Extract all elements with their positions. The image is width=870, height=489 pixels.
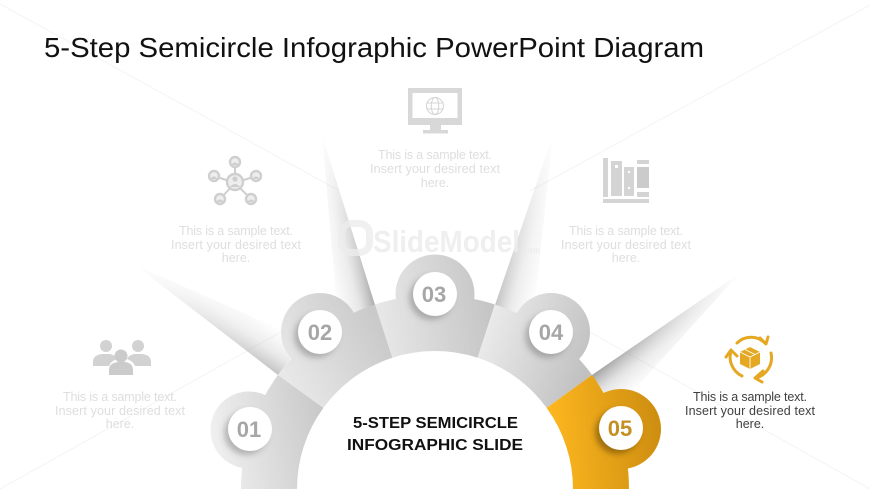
number badge 01 [224,407,272,455]
text: step 5: Insert your desired text [685,404,816,418]
step 2 segment [278,293,392,408]
number badge 04: 04 [539,320,564,345]
step 4 segment [478,293,592,408]
icon: network of people [209,157,261,204]
text: step 1: here. [106,417,134,431]
number badge 03: 03 [422,282,446,307]
icon: books on shelf [603,158,649,203]
shadow ray: between steps 3 and 4 [495,168,544,313]
text: step 5: here. [736,417,764,431]
shadow ray: between steps 1 and 2 [164,286,291,375]
number badge 02: 02 [308,320,332,345]
icon: people group [93,340,151,375]
watermark: .com [520,246,540,255]
step 5 segment [547,375,661,489]
text: step 3: This is a sample text. [378,148,492,162]
text: step 2 [171,224,302,265]
number badge 03 [409,272,457,320]
text: step 4: This is a sample text. [569,224,683,238]
center heading: INFOGRAPHIC SLIDE [347,437,523,454]
text: step 5 [685,390,816,431]
shadow ray: between steps 4 and 5 [592,286,724,392]
number badge 05: 05 [608,416,632,441]
text: step 3 [370,148,501,190]
center heading: 5-STEP SEMICIRCLE [353,415,518,432]
text: step 1 [55,390,186,431]
step 3 segment [375,254,495,358]
number badge 02 [294,310,342,358]
shadow ray: between steps 2 and 3 [327,161,375,312]
text: step 4 [561,224,692,265]
text: step 2: Insert your desired text [171,238,302,252]
center heading [347,415,523,454]
text: step 3: Insert your desired text [370,162,501,176]
watermark: SlideModel [373,224,520,259]
text: step 2: This is a sample text. [179,224,293,238]
number badge 01: 01 [237,417,261,442]
text: step 3: here. [421,176,449,190]
icon: monitor with globe [408,88,462,134]
text: step 4: Insert your desired text [561,238,692,252]
step 1 segment [210,375,323,489]
text: step 2: here. [222,251,250,265]
number badge 05 [595,406,643,454]
text: step 5: This is a sample text. [693,390,807,404]
number badge 04 [525,310,573,358]
text: step 1: Insert your desired text [55,404,186,418]
text: step 1: This is a sample text. [63,390,177,404]
icon: package with cycle arrows [726,337,772,382]
text: step 4: here. [612,251,640,265]
title: 5-Step Semicircle Infographic PowerPoint Diagram [44,32,704,63]
